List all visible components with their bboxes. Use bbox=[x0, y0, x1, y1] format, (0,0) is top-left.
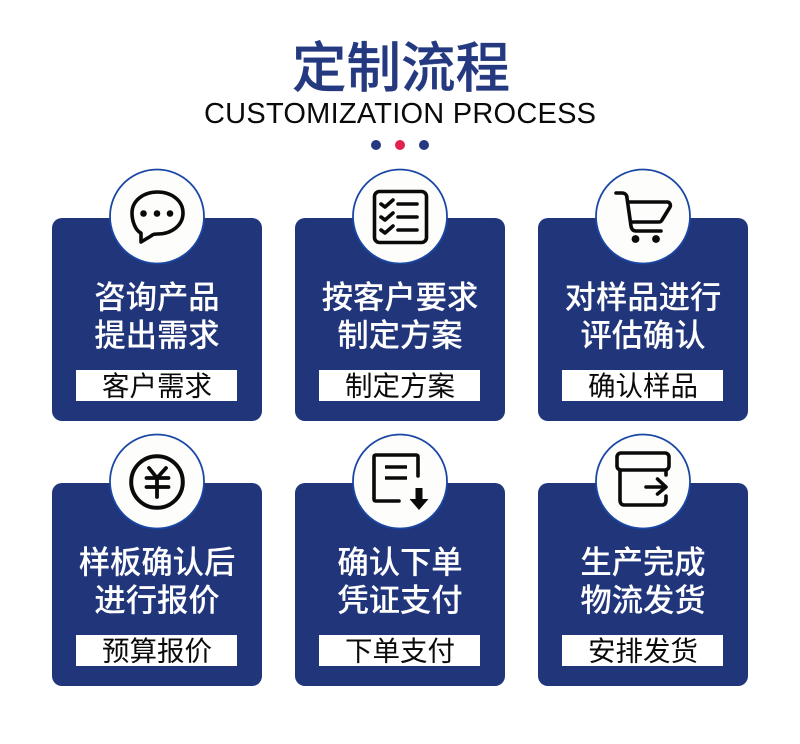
label bbox=[76, 370, 237, 402]
label bbox=[319, 370, 480, 402]
subtitle: CUSTOMIZATION PROCESS bbox=[204, 98, 596, 130]
label bbox=[562, 370, 723, 402]
heading: 咨询产品 bbox=[94, 280, 220, 315]
panel: step 2 bbox=[295, 170, 505, 421]
icon: chat bubble bbox=[132, 192, 183, 242]
heading: 确认下单 bbox=[337, 545, 463, 580]
label bbox=[76, 635, 237, 666]
heading line 2: 提出需求 bbox=[94, 318, 220, 353]
label bbox=[562, 635, 723, 666]
heading line 2: 制定方案 bbox=[337, 318, 463, 353]
heading: 生产完成 bbox=[580, 545, 706, 580]
label: 预算报价 bbox=[102, 636, 212, 666]
panel: step 4 bbox=[52, 434, 262, 686]
panel: step 6 bbox=[538, 434, 748, 686]
panel: step 3 bbox=[538, 170, 748, 421]
label: 确认样品 bbox=[588, 370, 698, 402]
decorative dots bbox=[371, 140, 429, 150]
heading line 2: 物流发货 bbox=[580, 583, 706, 618]
title: 定制流程 bbox=[292, 38, 510, 99]
icon: box with arrow bbox=[617, 453, 669, 505]
heading: 样板确认后 bbox=[79, 545, 235, 580]
label: 下单支付 bbox=[345, 636, 455, 666]
label: 安排发货 bbox=[588, 636, 698, 666]
label bbox=[319, 635, 480, 666]
heading line 2: 进行报价 bbox=[94, 583, 220, 618]
heading line 2: 凭证支付 bbox=[337, 583, 463, 618]
panel: step 5 bbox=[295, 434, 505, 686]
heading: 按客户要求 bbox=[322, 280, 478, 315]
icon: document download bbox=[374, 455, 428, 510]
panel: step 1 bbox=[52, 170, 262, 421]
heading: 对样品进行 bbox=[565, 280, 721, 315]
icon: checklist bbox=[374, 192, 426, 242]
icon: shopping cart bbox=[616, 193, 670, 243]
label: 客户需求 bbox=[102, 370, 212, 402]
heading line 2: 评估确认 bbox=[580, 318, 706, 353]
label: 制定方案 bbox=[345, 370, 455, 402]
icon: yen coin bbox=[131, 456, 183, 508]
